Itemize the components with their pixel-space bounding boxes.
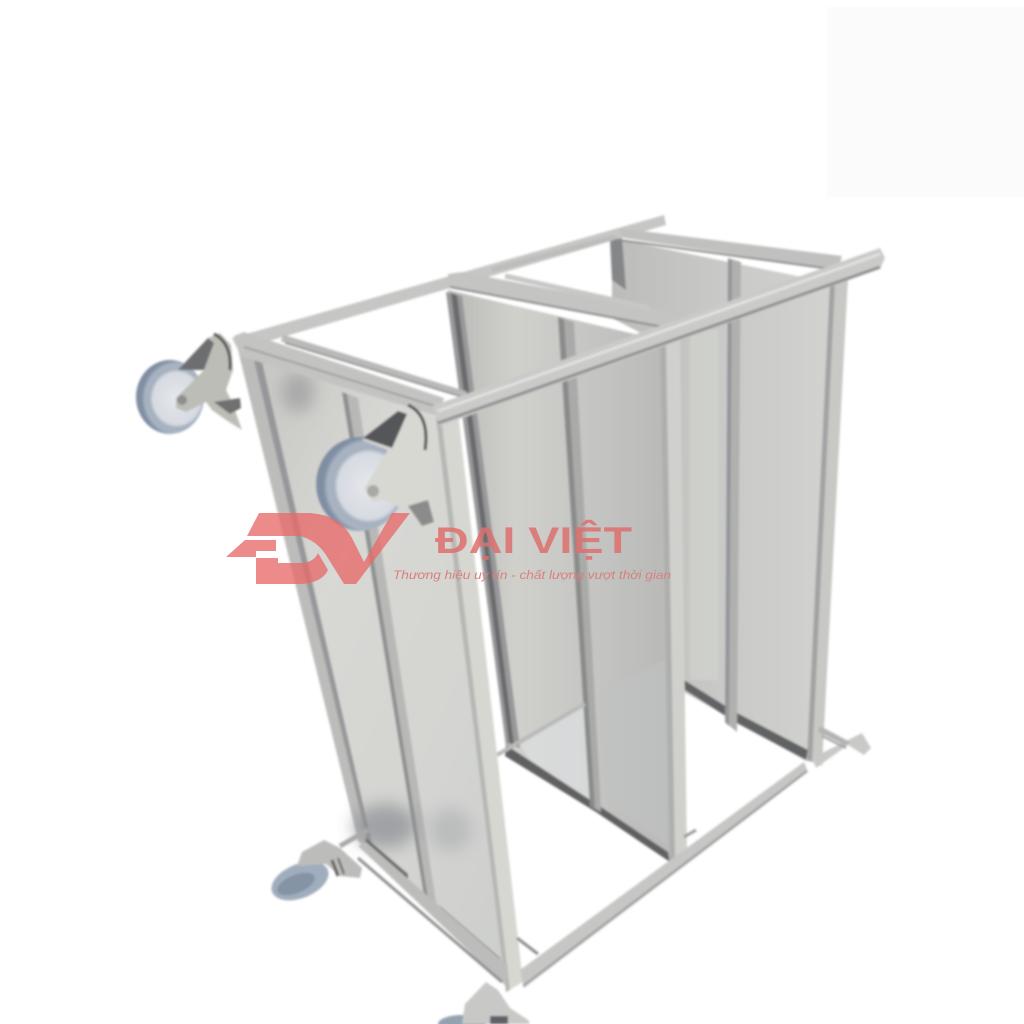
middle panel	[446, 290, 696, 866]
caster: upper right	[316, 405, 436, 531]
right long rail	[432, 248, 885, 426]
middle right post	[660, 338, 687, 866]
front right post	[436, 412, 523, 992]
front panel	[238, 350, 538, 992]
cross rod at bottom of middle panel	[497, 704, 585, 755]
front panel centre strut	[342, 392, 438, 915]
rear cross rail	[618, 228, 842, 270]
trolley frame and panels	[136, 215, 885, 1024]
thin rods	[492, 237, 615, 270]
inner rod near front post	[517, 938, 538, 954]
near-white rectangle at top right	[827, 7, 1024, 197]
left long rail	[232, 215, 666, 350]
front panel smudge	[282, 372, 314, 412]
caster: upper left	[136, 333, 242, 434]
front bottom rail	[358, 842, 508, 986]
brand name: ĐẠI VIỆT	[435, 519, 632, 561]
caster: lower right	[438, 982, 530, 1024]
bottom rail to right foot	[520, 762, 808, 988]
back panel	[610, 238, 848, 766]
back panel centre strut	[725, 258, 741, 732]
tagline: Thương hiệu uy tín - chất lượng vượt thời gian	[393, 570, 671, 582]
front panel reflection	[353, 804, 417, 848]
caster: lower left	[266, 830, 368, 908]
logo mark: DV	[226, 513, 410, 584]
front panel dark bottom edge	[364, 838, 408, 888]
middle panel reflection	[520, 705, 590, 800]
right foot	[812, 726, 871, 768]
middle panel dark bottom edge	[505, 745, 670, 862]
top rails	[232, 215, 885, 426]
logo watermark	[226, 513, 671, 584]
middle cross rail	[448, 272, 680, 328]
middle panel centre strut	[558, 317, 601, 812]
front cross rail	[234, 332, 444, 416]
front panel left edge	[238, 350, 372, 852]
back right post	[807, 278, 848, 766]
